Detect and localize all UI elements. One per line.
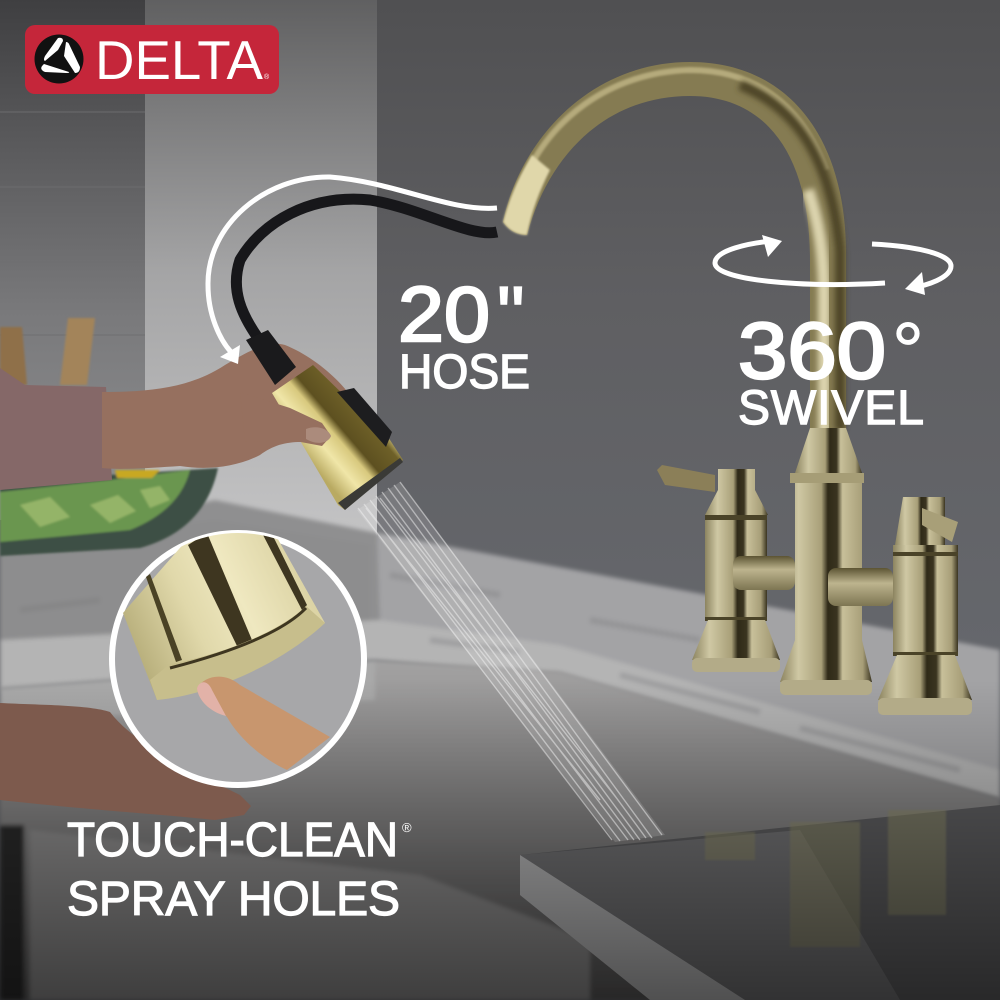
lower hand [0, 703, 251, 820]
label: 360 degree swivel [738, 306, 924, 435]
inset circle: touch-clean spray holes [112, 525, 364, 785]
bottom vignette [0, 680, 1000, 1000]
label: touch-clean spray holes: TOUCH-CLEAN [67, 814, 398, 867]
water spray [357, 482, 665, 842]
sink basin [0, 660, 1000, 1000]
faucet: gooseneck spout [503, 62, 846, 440]
label: touch-clean spray holes: SPRAY HOLES [67, 873, 400, 926]
hand holding sprayer [102, 344, 350, 469]
sprayer head [246, 330, 403, 510]
label: 360 degree swivel: SWIVEL [738, 382, 924, 435]
label: 20 inch hose: " [497, 270, 525, 358]
faucet: left handle [657, 465, 795, 672]
sleeve [0, 368, 112, 490]
label: 360 degree swivel: 360 [738, 306, 886, 395]
logo: Delta [25, 25, 279, 94]
logo: Delta: ® [264, 73, 270, 81]
label: touch-clean spray holes: ® [402, 820, 412, 835]
label: 20 inch hose [398, 270, 530, 399]
thumb over sprayer [240, 392, 331, 446]
label: touch-clean spray holes [67, 814, 412, 926]
logo: Delta: DELTA [95, 29, 263, 91]
white arrow: hose path [208, 177, 497, 364]
label: 360 degree swivel: ° [892, 306, 924, 395]
foreground counter with reflection [520, 805, 1000, 1000]
black hose [236, 199, 497, 338]
countertop [0, 500, 1000, 800]
label: 20 inch hose: 20 [398, 270, 490, 358]
salad bowl and utensils [0, 318, 218, 556]
swivel arrows [715, 235, 951, 295]
label: 20 inch hose: HOSE [399, 346, 530, 399]
faucet: center body [780, 428, 872, 695]
faucet: right handle [828, 497, 972, 715]
